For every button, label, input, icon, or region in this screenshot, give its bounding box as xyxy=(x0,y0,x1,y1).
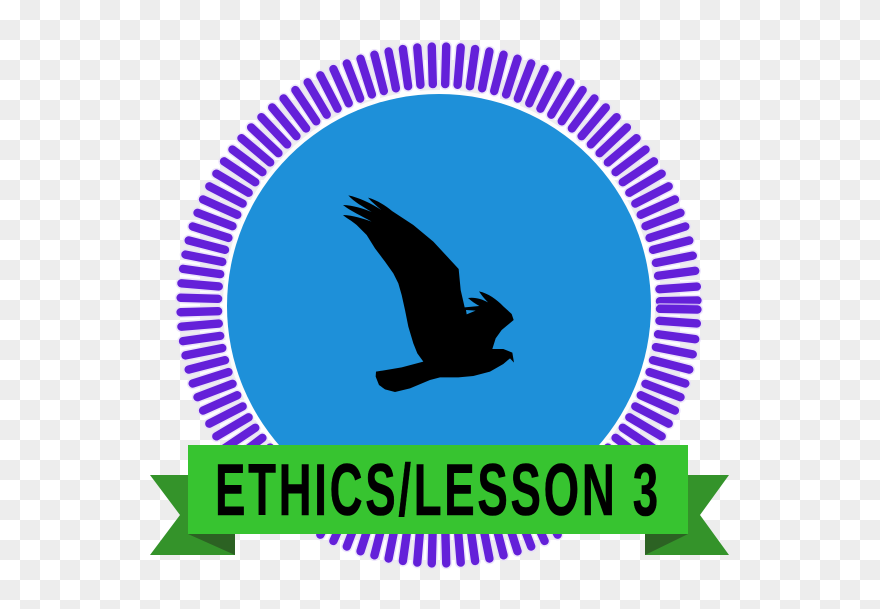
icon: eagle silhouette xyxy=(343,195,514,392)
ribbon: main banner xyxy=(188,445,688,534)
blue circle xyxy=(223,90,655,522)
ribbon: right tail xyxy=(645,475,729,555)
banner title: ETHICS/LESSON 3 xyxy=(215,449,661,531)
ribbon: left tail xyxy=(150,475,235,555)
purple tick ring xyxy=(181,47,697,563)
